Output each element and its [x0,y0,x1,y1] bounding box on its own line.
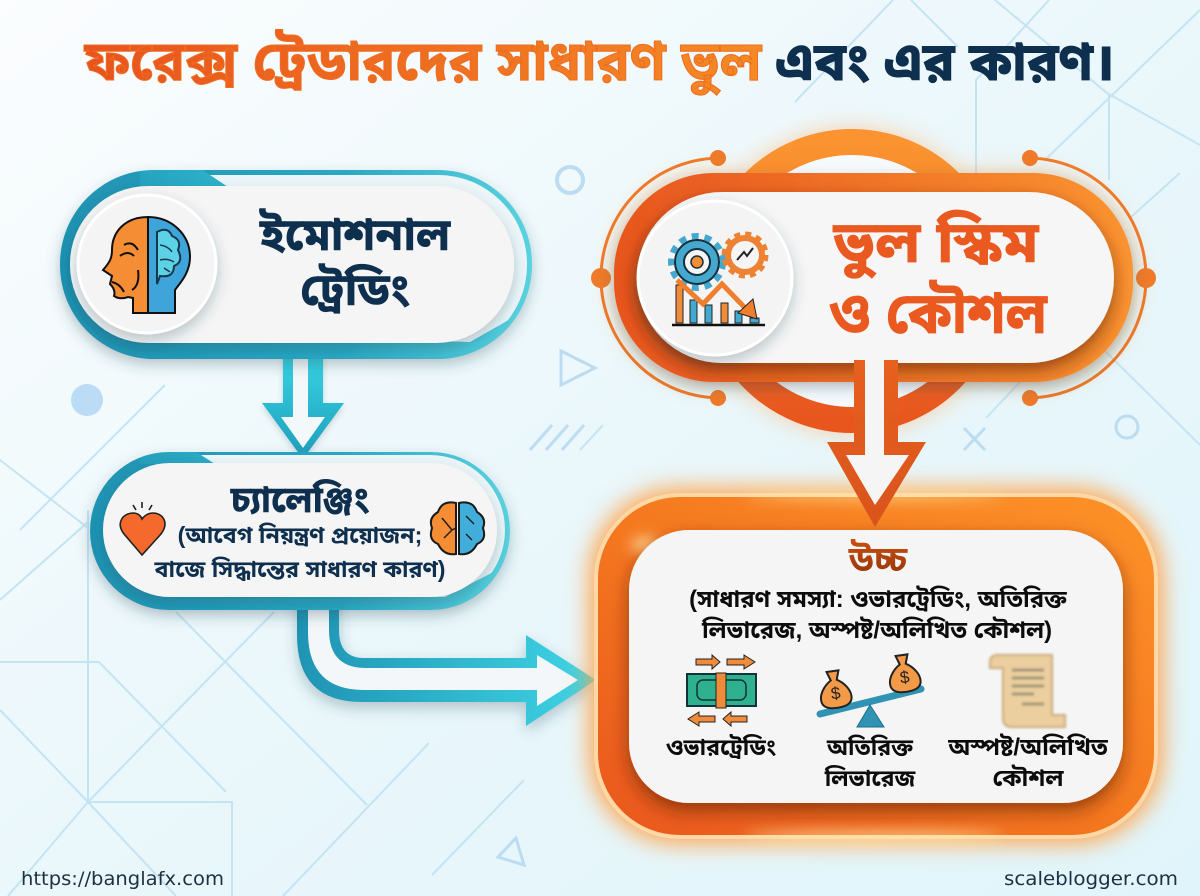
icon labels: ওভারট্রেডিং [666,733,776,760]
heading and description: (সাধারণ সমস্যা: ওভারট্রেডিং, অতিরিক্ত [689,585,1067,613]
icon: half face half brain head [78,195,216,333]
title: ফরেক্স ট্রেডারদের সাধারণ ভুল [84,29,763,95]
heading: wrong schemes: ভুল স্কিম [832,209,1039,279]
pill face [103,463,497,597]
rim highlights [631,493,1005,840]
title [84,29,1114,95]
arrow: emotional trading to challenging [262,340,344,459]
text: challenging description: চ্যালেঞ্জিং [230,479,369,520]
decorative ring [713,142,991,420]
panel: high [590,489,1162,843]
heading: emotional trading [259,208,451,315]
arrow: wrong schemes to high [827,360,926,527]
orange glow [612,129,1136,433]
panel: emotional trading [60,170,532,359]
panel: wrong schemes and strategy [591,129,1156,433]
icon labels: অস্পষ্ট/অলিখিত [947,733,1109,761]
pill face [70,186,514,343]
heading and description [689,539,1067,644]
heading: emotional trading: ট্রেডিং [300,263,410,315]
icon: leverage seesaw: $ [899,667,911,688]
title: এবং এর কারণ। [776,33,1114,92]
text: challenging description: (আবেগ নিয়ন্ত্রণ প্রয়োজন; [178,521,422,548]
icon: leverage seesaw: $ [830,683,842,704]
icon labels: অতিরিক্ত [826,733,914,760]
icon labels [666,733,1109,792]
footer: source left: https://banglafx.com [21,868,224,890]
arrow: challenging to high [297,590,596,726]
icon: heart [120,502,165,555]
pill face [637,192,1114,363]
heading: emotional trading: ইমোশনাল [259,208,451,260]
panel: challenging [90,452,510,610]
decorative shapes [71,167,1138,865]
heading: wrong schemes [829,209,1048,346]
icon labels: কৌশল [992,764,1064,792]
text: challenging description [154,479,445,582]
icon: blurred scroll [990,655,1065,727]
icon labels: লিভারেজ [824,764,916,791]
heading and description: লিভারেজ, অস্পষ্ট/অলিখিত কৌশল) [701,616,1052,644]
footer: source right: scaleblogger.com [1004,868,1178,890]
outer glow [590,489,1162,843]
panel face [629,530,1123,803]
connector arcs [591,150,1156,406]
heading and description: উচ্চ [848,539,908,579]
text: challenging description: বাজে সিদ্ধান্তের সাধারণ কারণ) [154,555,445,582]
icon: overtrading money [687,655,756,726]
icon: leverage seesaw [817,653,922,727]
icon: gears and falling chart [638,201,792,355]
icon: brain [431,502,484,554]
heading: wrong schemes: ও কৌশল [829,279,1048,346]
